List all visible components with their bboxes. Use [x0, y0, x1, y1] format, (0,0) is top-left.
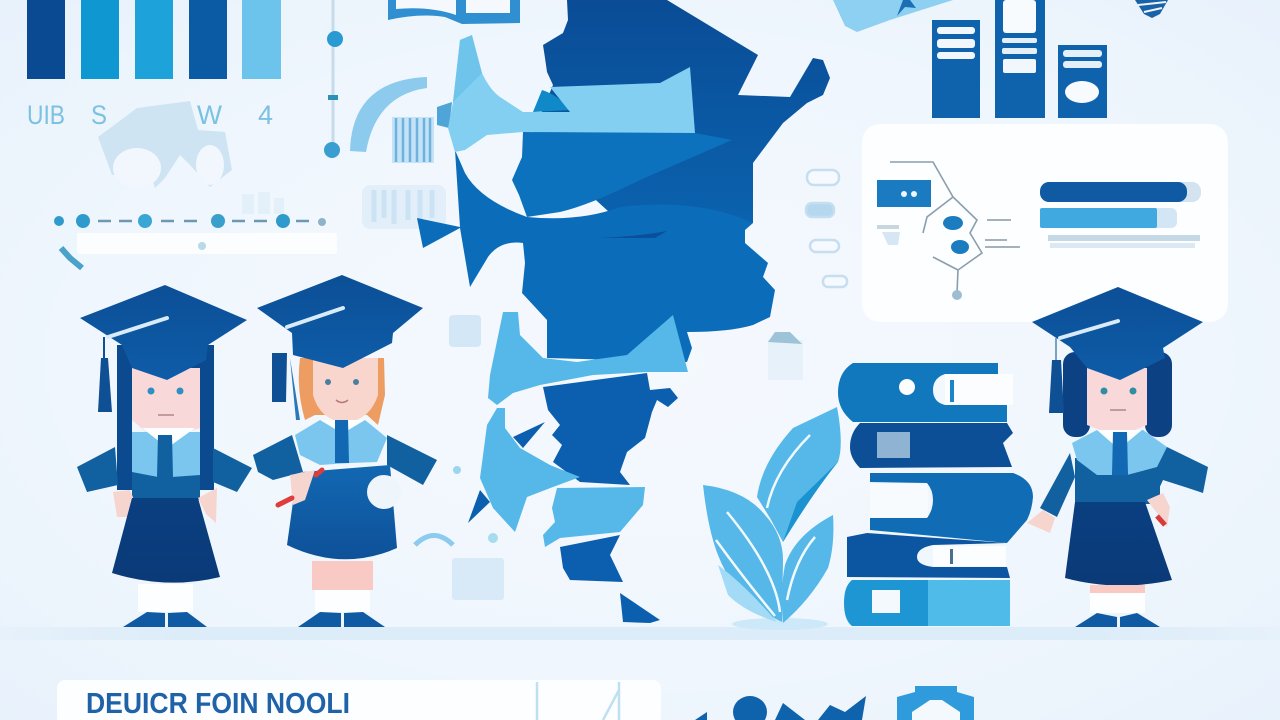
- map: small dark slivers: [468, 422, 545, 523]
- central map silhouette: [417, 0, 830, 623]
- bar chart labels: S: [91, 100, 107, 130]
- vertical chain decoration: [324, 0, 343, 158]
- gown: [77, 447, 252, 492]
- map: lower tip: [560, 535, 623, 582]
- book 3: [870, 473, 1033, 543]
- bottom blue ornament: [695, 696, 866, 720]
- map: middle band: [512, 132, 732, 217]
- book 4: [847, 533, 1010, 578]
- bar chart labels: 4: [258, 100, 273, 130]
- white dashboard panel: [862, 124, 1228, 322]
- floor line: [0, 627, 1280, 640]
- book 1: [838, 363, 1007, 422]
- bottom white title bar: DEUICR FOIN NOOLI: [86, 688, 350, 720]
- graduate left: [77, 285, 252, 627]
- white strip: [77, 233, 337, 254]
- bottom white title bar: [57, 680, 661, 720]
- map: bottom triangle: [620, 593, 660, 623]
- open book top: [388, 0, 520, 24]
- bars top right: [932, 0, 1107, 118]
- gauge and small bar icon: [350, 77, 452, 163]
- map: lower light trumpet: [488, 312, 688, 405]
- light bulb: [1135, 0, 1168, 18]
- bar chart labels: W: [197, 100, 223, 130]
- top paper shape: [833, 0, 953, 32]
- map: upper light trumpet: [448, 35, 695, 152]
- book 2: [850, 423, 1013, 468]
- graduate middle: [253, 275, 437, 627]
- pill buttons: [806, 170, 847, 287]
- map: light block: [543, 487, 645, 547]
- book stack: [838, 363, 1033, 626]
- map: third light trumpet: [480, 408, 580, 532]
- faint small chart: [242, 192, 284, 214]
- map: small blue triangle: [533, 90, 570, 112]
- faint small icons: [415, 315, 803, 600]
- dotted timeline: [54, 214, 326, 228]
- bar chart labels: [27, 100, 273, 130]
- bar chart top left: [27, 0, 281, 79]
- small node icon: [61, 248, 82, 268]
- map: dark top region: [530, 0, 830, 223]
- bar chart labels: UIB: [27, 100, 65, 130]
- faint world map: [98, 101, 232, 188]
- book 5: [844, 580, 928, 626]
- faint panel with bars: [362, 185, 446, 229]
- graduate right: [1027, 287, 1208, 627]
- bottom shield icon: [897, 686, 974, 720]
- map: lower body with fishtail: [417, 150, 775, 362]
- map: mid dark body: [543, 373, 678, 485]
- plant: [703, 407, 841, 630]
- cap: [117, 345, 214, 490]
